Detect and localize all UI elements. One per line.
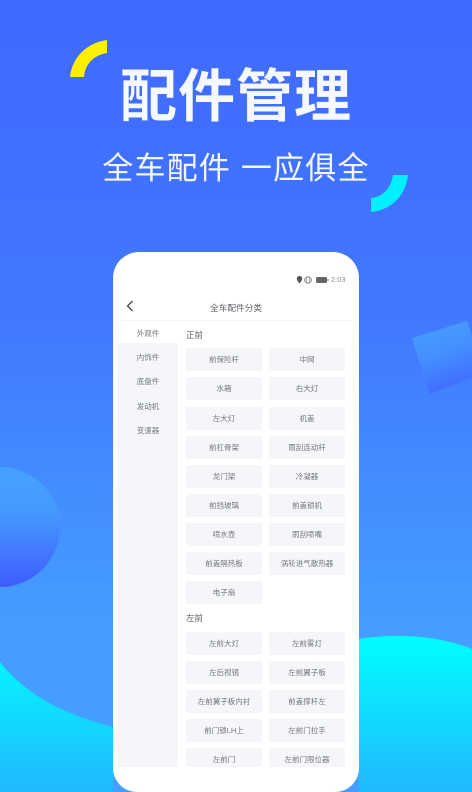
part button	[269, 436, 345, 459]
part button: 左后视镜	[209, 668, 239, 677]
part button	[186, 552, 262, 575]
part button: 左前门限位器	[284, 755, 330, 764]
part button	[186, 407, 262, 430]
part button: 电子扇	[213, 588, 235, 597]
part button: 机盖	[300, 414, 314, 423]
panel: phone	[113, 252, 359, 792]
part button	[269, 690, 345, 713]
part button	[186, 436, 262, 459]
part button	[186, 465, 262, 488]
part button	[269, 465, 345, 488]
part button: 前门锁LH上	[204, 726, 244, 735]
part button: 冷凝器	[296, 472, 318, 481]
sidebar item: 底盘件	[137, 377, 159, 386]
status bar	[296, 275, 346, 284]
part button: 前杠骨架	[209, 443, 239, 452]
part button	[269, 632, 345, 655]
part button	[269, 523, 345, 546]
part button	[186, 661, 262, 684]
part button: 前盖锁机	[292, 501, 322, 510]
section heading: 左前	[186, 613, 203, 623]
part button: 左前门拉手	[288, 726, 326, 735]
part button	[269, 552, 345, 575]
part button: 涡轮进气散热器	[281, 559, 333, 568]
part button	[269, 377, 345, 400]
title: 配件管理	[120, 65, 352, 129]
wave	[0, 636, 472, 792]
tilted square decoration	[412, 321, 472, 394]
panel: sidebar	[118, 343, 178, 767]
sidebar item: 变速器	[137, 426, 159, 435]
part button	[269, 719, 345, 742]
part button	[269, 661, 345, 684]
part button	[269, 494, 345, 517]
part button: 左前翼子板	[288, 668, 326, 677]
part button: 左前门	[213, 755, 235, 764]
subtitle: 全车配件 一应俱全	[102, 151, 370, 186]
part button: 前盖隔热板	[205, 559, 243, 568]
cyan arc	[371, 175, 408, 212]
yellow arc	[70, 40, 107, 77]
sidebar item: 发动机	[137, 402, 159, 411]
section heading: 正前	[186, 330, 203, 340]
page heading: 全车配件分类	[210, 303, 262, 313]
part button	[186, 377, 262, 400]
part button: 前盖撑杆左	[288, 697, 326, 706]
part button: 水箱	[216, 384, 232, 393]
divider line	[118, 320, 354, 321]
part button	[186, 632, 262, 655]
part button: 雨刮连动杆	[288, 443, 326, 452]
part button: 前挡玻璃	[209, 501, 239, 510]
part button: 龙门架	[213, 472, 235, 481]
part button: 喷水壶	[213, 530, 235, 539]
part button: 左前雾灯	[292, 639, 322, 648]
part button	[186, 348, 262, 371]
part button	[186, 494, 262, 517]
part button: 右大灯	[296, 384, 318, 393]
part button	[269, 748, 345, 767]
sidebar item: 外观件	[137, 329, 159, 338]
part button	[186, 719, 262, 742]
part button: 左大灯	[213, 414, 235, 423]
part button: 雨刮喷嘴	[292, 530, 322, 539]
part button	[269, 407, 345, 430]
part button: 左前大灯	[209, 639, 239, 648]
part button	[186, 523, 262, 546]
sidebar item: 内饰件	[137, 353, 159, 362]
part button: 前保险杆	[209, 355, 239, 364]
part button	[269, 348, 345, 371]
part button	[186, 690, 262, 713]
icon: back arrow	[126, 300, 133, 312]
part button: 左前翼子板内衬	[198, 697, 250, 706]
status bar: 2:03	[331, 275, 346, 284]
circle decoration	[0, 467, 60, 587]
part button	[186, 581, 262, 604]
part button	[186, 748, 262, 767]
part button: 中网	[300, 355, 314, 364]
